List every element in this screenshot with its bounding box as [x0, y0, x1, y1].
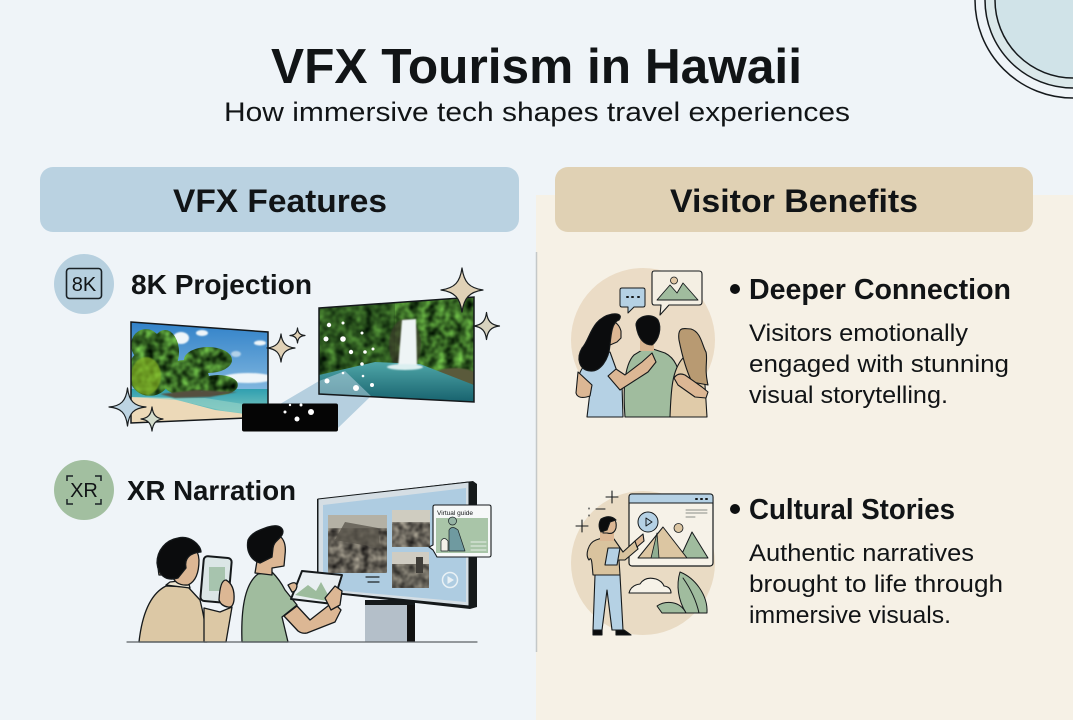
panel header: VFX Features	[40, 167, 519, 232]
icon: XR badge: XR	[70, 480, 98, 502]
panel header: VFX Features: VFX Features	[173, 183, 387, 219]
description text: brought to life through	[749, 571, 1003, 598]
description text	[749, 320, 1009, 409]
description text: visual storytelling.	[749, 382, 948, 409]
description text: Visitors emotionally	[749, 320, 968, 347]
icon: 8K badge	[54, 254, 114, 314]
decorative corner circle	[975, 0, 1073, 98]
description text	[749, 540, 1003, 629]
tropical leaves	[657, 572, 707, 613]
speech bubble: chat	[620, 288, 645, 313]
illustration: guide presenting window	[571, 491, 715, 635]
panel header: Visitor Benefits	[555, 167, 1033, 232]
panel: Deeper Connection	[571, 268, 1011, 417]
display monitor	[317, 481, 491, 609]
bullet	[730, 504, 740, 514]
sparkles	[109, 268, 500, 431]
projector	[242, 404, 338, 432]
panel header: Visitor Benefits: Visitor Benefits	[670, 183, 918, 219]
panel: 8K Projection	[54, 254, 500, 432]
ground line	[127, 641, 477, 643]
man from behind	[624, 316, 678, 417]
description text: engaged with stunning	[749, 351, 1009, 378]
speech bubble: image	[652, 271, 702, 315]
plus marks	[576, 491, 618, 532]
heading: Cultural Stories: Cultural Stories	[749, 494, 955, 526]
panel: XR Narration	[54, 460, 491, 642]
description text: Authentic narratives	[749, 540, 974, 567]
play button	[442, 572, 458, 588]
virtual guide callout: Virtual guide	[437, 510, 473, 517]
projection beam	[280, 381, 370, 428]
virtual guide callout	[429, 505, 491, 557]
presenter	[587, 517, 644, 635]
illustration: visitors with devices at display	[127, 481, 491, 642]
heading: XR Narration: XR Narration	[127, 475, 296, 506]
waterfall screen	[318, 296, 479, 404]
caption lines	[366, 577, 379, 582]
heading: Deeper Connection: Deeper Connection	[749, 274, 1011, 306]
bullet	[730, 284, 740, 294]
icon: 8K badge: 8K	[72, 274, 97, 296]
beach screen	[128, 320, 274, 425]
display stand	[365, 600, 415, 642]
description text: immersive visuals.	[749, 602, 951, 629]
column divider	[536, 252, 538, 652]
illustration: three visitors with speech bubbles	[571, 268, 715, 417]
cream right panel	[536, 195, 1073, 720]
woman with dark hair	[576, 314, 656, 417]
title: VFX Tourism in Hawaii	[271, 40, 802, 94]
subtitle: How immersive tech shapes travel experiences	[224, 97, 850, 127]
historic photos	[328, 510, 430, 588]
man with tablet	[242, 526, 342, 642]
illustration: projector and beach and waterfall screens	[109, 268, 500, 432]
woman with phone	[139, 537, 234, 642]
icon: XR badge	[54, 460, 114, 520]
backdrop circle	[571, 268, 715, 412]
backdrop circle	[571, 491, 715, 635]
panel: Cultural Stories	[571, 491, 1003, 635]
heading: 8K Projection: 8K Projection	[131, 269, 312, 300]
cloud	[629, 578, 671, 593]
browser window	[629, 494, 713, 566]
woman with tan hair	[670, 329, 708, 417]
